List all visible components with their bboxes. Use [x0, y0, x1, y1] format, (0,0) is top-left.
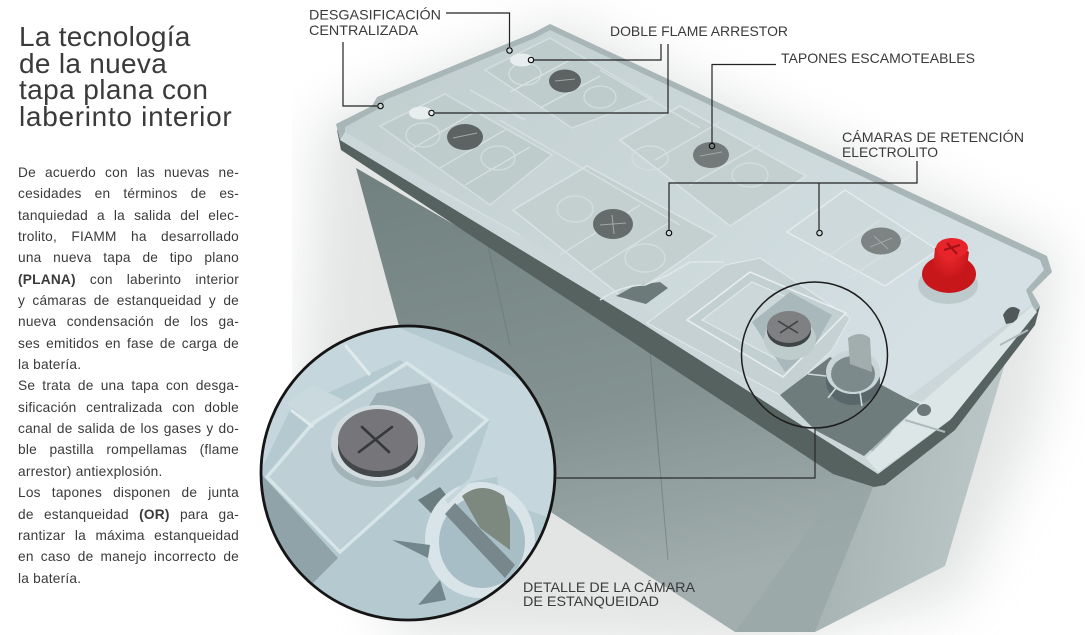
panel: centre left compartment	[513, 166, 716, 300]
callout: cámaras de retención electrolito: ELECTROLITO	[842, 144, 938, 160]
body text: trolito, FIAMM ha desarrollado	[18, 229, 239, 244]
callout: desgasificación centralizada	[309, 6, 512, 109]
vent fins	[392, 540, 430, 558]
lid	[336, 24, 1052, 487]
dark cut-away floor	[780, 357, 920, 456]
lid edge over vent	[445, 421, 497, 504]
vent cylinder	[462, 488, 510, 550]
small detail contents	[752, 292, 880, 406]
callout: cámaras de retención electrolito	[666, 129, 1024, 236]
vent ring	[826, 376, 880, 405]
callout: desgasificación centralizada: DESGASIFICACIÓN	[309, 6, 441, 22]
front face	[356, 168, 880, 632]
vent caps	[409, 54, 534, 120]
lid right-hand corner detail	[866, 306, 1037, 472]
callout: detalle de la cámara: DE ESTANQUEIDAD	[523, 593, 659, 609]
front corner highlight	[735, 460, 880, 632]
callout: detalle de la cámara	[523, 579, 696, 609]
case partition lines	[488, 245, 668, 560]
battery body	[356, 168, 1006, 632]
dark lower left wedge	[262, 475, 338, 583]
inner tray	[687, 272, 846, 377]
body text: rantizar la máxima estanqueidad	[18, 528, 239, 543]
body text: nueva condensación de los ga-	[18, 314, 239, 329]
raised block	[293, 392, 342, 426]
round recesses	[406, 63, 768, 272]
tray outline	[267, 363, 487, 552]
body text: y cámaras de estanqueidad y de	[18, 293, 239, 308]
body text: (PLANA) con laberinto interior	[18, 272, 239, 287]
body text: la batería.	[18, 571, 81, 586]
battery illustration with callouts	[260, 7, 1068, 635]
plug ring	[764, 327, 816, 360]
callout: doble flame arrestor	[429, 23, 788, 116]
title	[19, 21, 232, 132]
tray floor	[267, 363, 487, 548]
callout: cámaras de retención electrolito: CÁMARAS DE RETENCIÓN	[842, 129, 1024, 145]
body text: en caso de manejo incorrecto de	[18, 549, 239, 564]
plug cap	[338, 442, 418, 477]
panel: rear right compartment	[620, 106, 806, 226]
title: de la nueva	[19, 48, 167, 78]
detail magnifier: large circle	[255, 326, 555, 620]
vent diagonal wall	[445, 503, 515, 578]
panel: rear left compartment	[380, 94, 552, 205]
upper lid surface	[255, 326, 555, 520]
body text: cesidades en términos de es-	[18, 186, 239, 201]
dark notch	[616, 282, 668, 304]
raised tray block	[647, 258, 850, 395]
filler plugs	[447, 70, 901, 254]
callout: detalle de la cámara: DETALLE DE LA CÁMARA	[523, 579, 696, 595]
body text: ses emitidos en fase de carga de	[18, 336, 239, 351]
torn edge	[600, 262, 724, 300]
body text: arrestor) antiexplosión.	[18, 464, 163, 479]
detail magnifier: small circle	[742, 282, 888, 428]
front rim light strip	[340, 132, 1036, 474]
lid cut-away	[600, 258, 850, 395]
title: laberinto interior	[19, 100, 232, 132]
lid top surface	[345, 30, 1044, 400]
vent ring	[425, 482, 535, 598]
red terminal	[918, 238, 978, 304]
body text: la batería.	[18, 357, 81, 372]
callout: doble flame arrestor: DOBLE FLAME ARRESTOR	[610, 23, 788, 39]
gas cylinder	[848, 334, 872, 372]
dark channel	[418, 487, 446, 514]
callout: tapones escamoteables: TAPONES ESCAMOTEABLES	[781, 50, 975, 66]
lid outer shell	[336, 24, 1052, 474]
tray rib	[291, 345, 370, 427]
callout: desgasificación centralizada: CENTRALIZADA	[309, 22, 419, 38]
plug in circle	[767, 328, 811, 347]
body text: ble pastilla rompellamas (flame	[18, 442, 239, 457]
title: tapa plana con	[19, 74, 208, 105]
body text: canal de salida de los gases y do-	[18, 421, 239, 436]
body text: de estanqueidad (OR) para ga-	[18, 506, 239, 522]
panel: right compartment	[787, 190, 938, 286]
body text: Los tapones disponen de junta	[18, 485, 239, 500]
lid rim underside	[337, 130, 1040, 487]
body text: tanquiedad a la salida del elec-	[18, 208, 239, 223]
body text: De acuerdo con las nuevas ne-	[18, 165, 239, 180]
body text	[18, 165, 239, 586]
plug collar	[331, 450, 414, 487]
ring fins	[808, 374, 862, 406]
rear right post	[1003, 307, 1020, 324]
ground shadow	[300, 20, 1060, 635]
connector: detail circles	[555, 428, 815, 478]
panel: rear centre compartment	[485, 38, 652, 128]
right face	[815, 360, 1006, 632]
title: La tecnología	[19, 21, 191, 52]
body text: una nueva tapa de tipo plano	[18, 250, 239, 265]
tray recess	[752, 292, 832, 372]
plug cross	[359, 427, 392, 452]
dark tray recess	[360, 383, 453, 480]
compartment internal ribs	[410, 60, 910, 278]
callout: tapones escamoteables	[709, 50, 975, 149]
body text: Se trata de una tapa con desga-	[18, 378, 239, 393]
body text: sificación centralizada con doble	[18, 400, 239, 415]
